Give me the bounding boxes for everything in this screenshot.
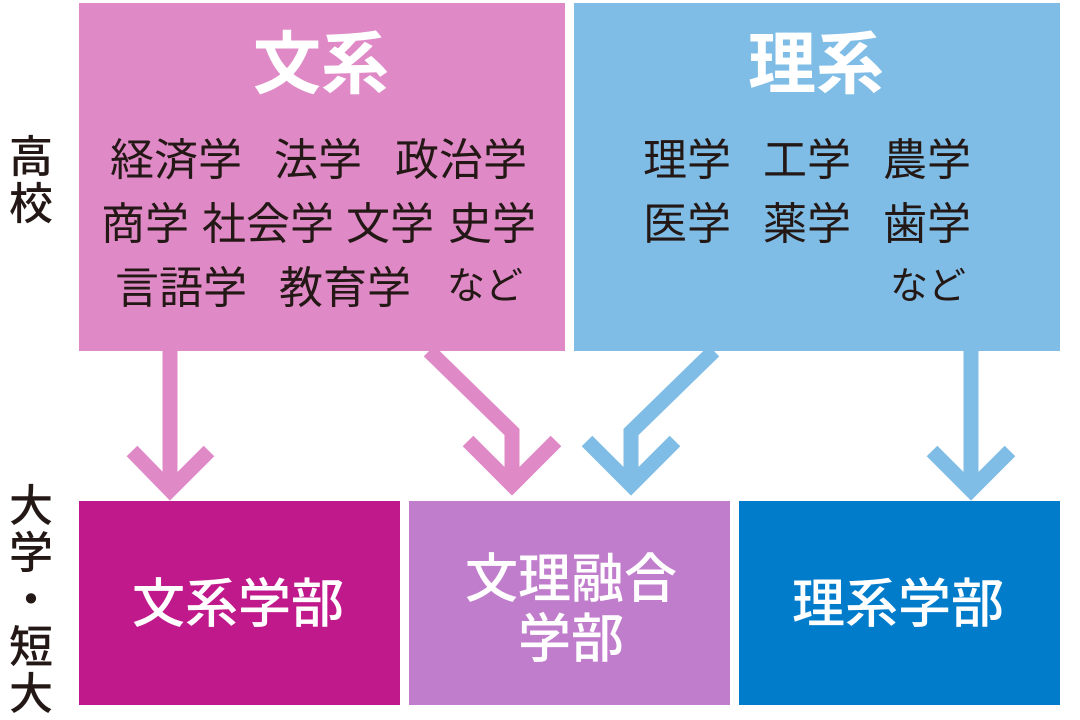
subjects: 文系: 経済学 <box>110 136 242 185</box>
box: 文理融合学部: 学部 <box>518 610 624 669</box>
subjects: 文系: 法学 <box>274 136 362 185</box>
subjects: 文系: 言語学 <box>115 264 247 313</box>
panel: 文系 <box>79 3 565 351</box>
arrow: 文系 to 文系学部 <box>132 351 209 490</box>
box: 理系学部: 理系学部 <box>792 575 1004 634</box>
subjects: 文系: 社会学 <box>202 200 334 249</box>
subjects: 文系: 史学 <box>448 200 536 249</box>
heading: 文系: 文系 <box>253 27 389 103</box>
arrow: 文系 to 文理融合学部 <box>429 351 556 485</box>
heading: 理系: 理系 <box>748 27 884 103</box>
box: 文系学部: 文系学部 <box>132 575 344 634</box>
subjects: 文系 <box>101 136 536 313</box>
label: 大学・短大: 学 <box>9 529 53 578</box>
box: 文理融合学部 <box>409 501 730 705</box>
label: 高校 <box>9 133 53 229</box>
box: 文系学部 <box>79 501 400 705</box>
label: 大学・短大: 大 <box>9 482 53 531</box>
subjects: 文系: 文学 <box>346 200 434 249</box>
label: 大学・短大: 短 <box>9 623 53 672</box>
panel: 理系 <box>574 3 1060 351</box>
box: 文理融合学部: 文理融合 <box>465 550 677 609</box>
label: 大学・短大 <box>9 482 53 719</box>
subjects: 文系: 教育学 <box>279 264 411 313</box>
subjects: 理系: 医学 <box>643 200 731 249</box>
arrow: 理系 to 文理融合学部 <box>587 351 714 485</box>
subjects: 理系: 薬学 <box>763 200 851 249</box>
box: 理系学部 <box>739 501 1060 705</box>
subjects: 理系 <box>643 136 971 308</box>
arrow: 理系 to 理系学部 <box>932 351 1010 490</box>
label: 高校: 校 <box>9 180 53 229</box>
label: 高校: 高 <box>9 133 53 182</box>
label: 大学・短大: 大 <box>9 670 53 719</box>
subjects: 理系: 歯学 <box>883 200 971 249</box>
subjects: 文系: など <box>447 266 523 308</box>
subjects: 文系: 政治学 <box>395 136 527 185</box>
subjects: 理系: など <box>890 266 966 308</box>
label: 大学・短大: ・ <box>9 576 53 625</box>
subjects: 理系: 工学 <box>763 136 851 185</box>
subjects: 文系: 商学 <box>101 200 189 249</box>
subjects: 理系: 理学 <box>643 136 731 185</box>
subjects: 理系: 農学 <box>883 136 971 185</box>
